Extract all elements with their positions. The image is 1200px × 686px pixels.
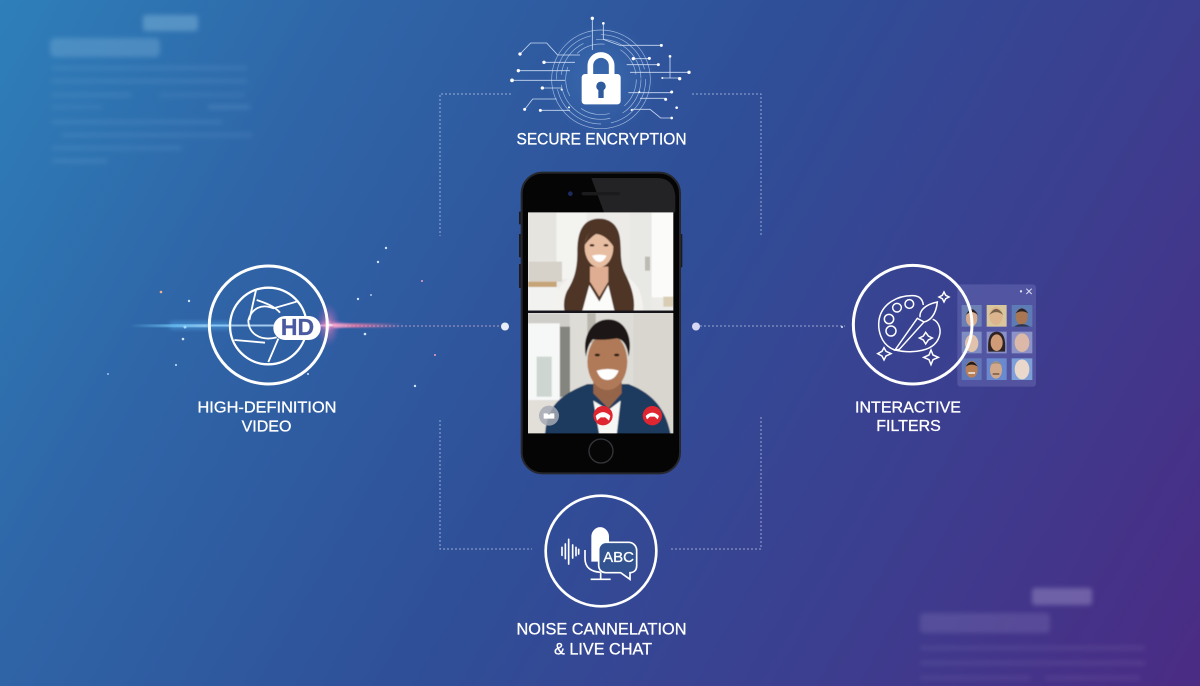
- call button: mute: [593, 406, 613, 425]
- call button: camera: [539, 406, 559, 426]
- label: interactive filters: FILTERS: [876, 418, 941, 435]
- sparkle particles: [107, 247, 843, 387]
- dashed connector lines: [345, 94, 845, 549]
- HD badge text: HD: [281, 314, 314, 340]
- connector node: left: [501, 322, 509, 330]
- speech bubble text: ABC: [603, 549, 634, 566]
- feature: high-definition video: [130, 266, 403, 436]
- icon: circle with palette and brush: [853, 265, 972, 384]
- blurred text block: bottom right: [920, 588, 1145, 680]
- label: high-definition video: VIDEO: [242, 418, 291, 436]
- feature: secure encryption: [510, 17, 691, 148]
- icon: microphone with speech bubble: [546, 496, 656, 606]
- feature: interactive filters: [853, 265, 1036, 435]
- icon: camera aperture with HD badge: [209, 266, 327, 384]
- connector node: right: [692, 322, 700, 330]
- feature: noise cancellation and live chat: [516, 496, 686, 658]
- label: noise cancellation and live chat: NOISE CANNELATION: [516, 620, 686, 638]
- label: noise cancellation and live chat: & LIVE CHAT: [554, 640, 652, 658]
- camera and speaker: [568, 191, 620, 196]
- icon: padlock with circuit rings: [510, 17, 691, 136]
- label: interactive filters: INTERACTIVE: [855, 400, 961, 416]
- label: high-definition video: HIGH-DEFINITION: [198, 400, 336, 416]
- phone mockup: [519, 173, 682, 473]
- face tiles: [962, 305, 1032, 380]
- phone body: [522, 173, 680, 473]
- lens flare beam: [130, 303, 403, 347]
- video tile: man: [527, 312, 675, 435]
- home button: [589, 439, 613, 463]
- phone side buttons: [519, 212, 682, 288]
- filter face panel: [957, 284, 1036, 387]
- video tile: woman: [527, 210, 675, 313]
- divider between video tiles: [528, 311, 673, 313]
- label: secure encryption: SECURE ENCRYPTION: [516, 130, 686, 148]
- bezel glare: [591, 178, 675, 212]
- blurred text block: top left: [50, 15, 252, 163]
- call button: end call: [643, 406, 662, 425]
